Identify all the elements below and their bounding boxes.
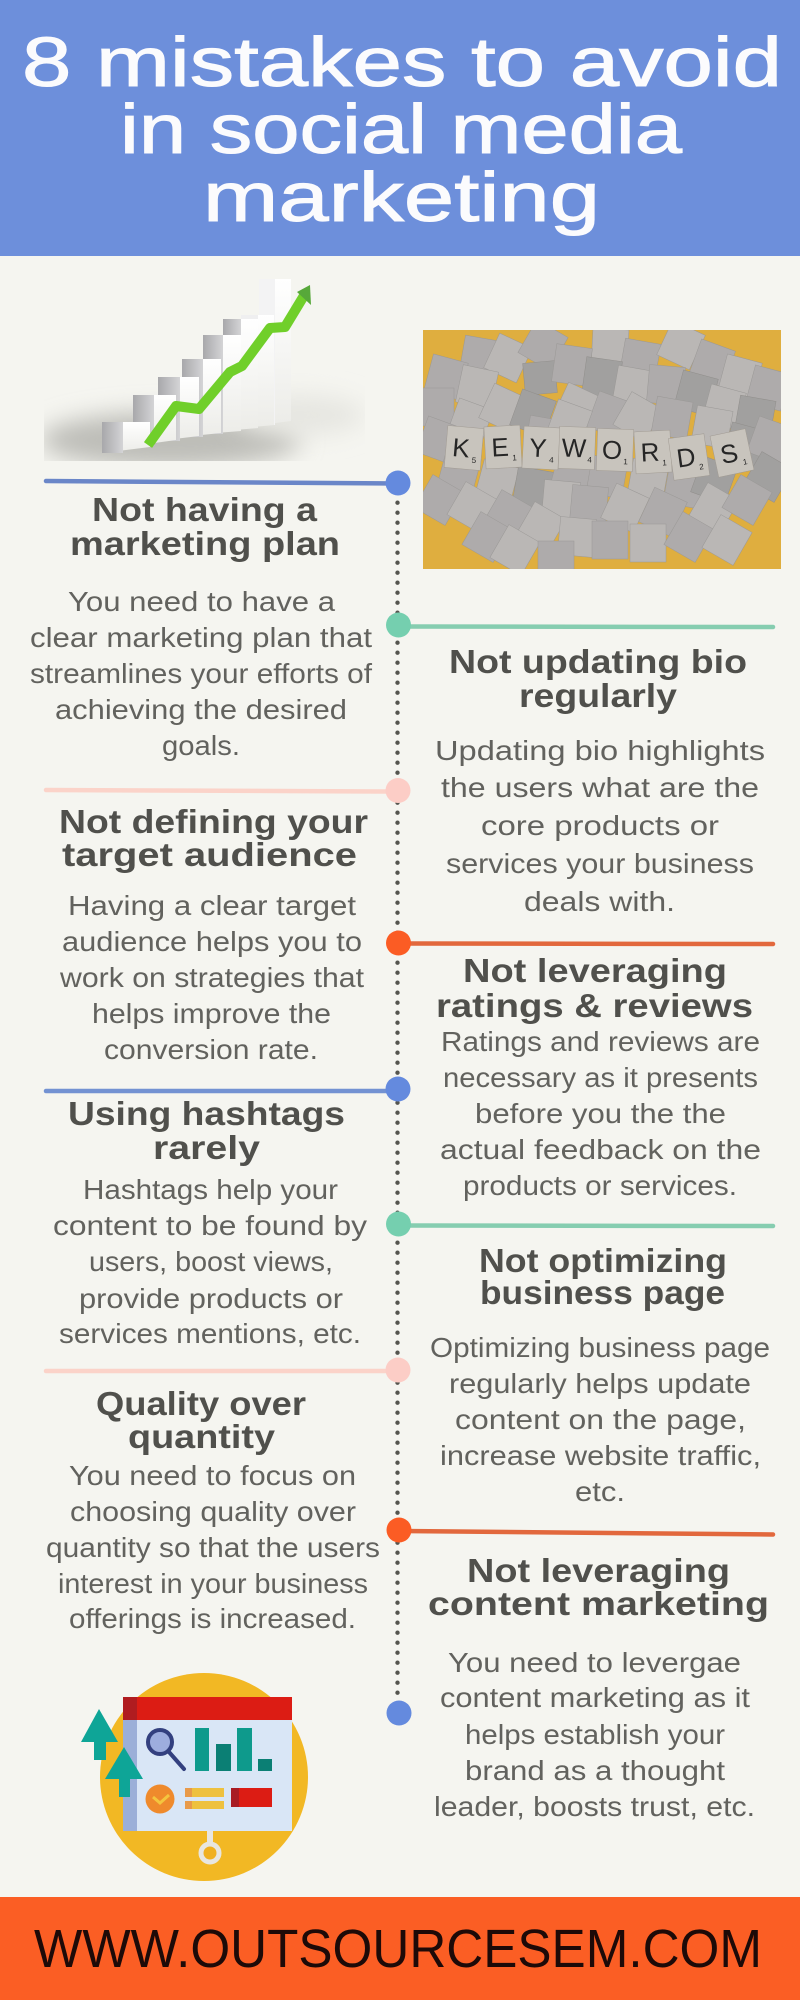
body text: quantity so that the users <box>46 1532 380 1563</box>
keyword letter tiles: 2 <box>699 462 705 472</box>
body text: leader, boosts trust, etc. <box>434 1791 755 1822</box>
connector: orange 1 <box>386 930 773 956</box>
icon: presentation board with analytics <box>81 1673 308 1881</box>
body text: streamlines your efforts of <box>30 658 372 689</box>
keyword letter tiles: 4 <box>587 455 593 465</box>
keyword letter tiles: 5 <box>471 456 477 465</box>
keyword letter tiles: E <box>491 432 509 463</box>
connector: green 1 <box>386 612 773 638</box>
body text: products or services. <box>463 1170 737 1201</box>
connector: blue 2 <box>46 1076 410 1102</box>
connector: orange 2 <box>386 1518 773 1542</box>
panel: using hashtags rarely <box>53 1095 367 1349</box>
body text: necessary as it presents <box>443 1062 758 1093</box>
heading: ratings & reviews <box>436 987 753 1024</box>
heading: Not leveraging <box>463 952 727 989</box>
keyword letter tiles: O <box>601 435 623 465</box>
heading: content marketing <box>428 1585 769 1622</box>
body text: You need to levergae <box>448 1647 741 1678</box>
keyword letter tiles: 1 <box>512 453 518 463</box>
heading: Quality over <box>96 1385 306 1422</box>
body text: You need to have a <box>68 586 335 617</box>
body text <box>59 890 364 1065</box>
keyword letter tiles: 1 <box>623 457 629 466</box>
body text: users, boost views, <box>89 1246 333 1277</box>
body text: before you the the <box>475 1098 726 1129</box>
heading: quantity <box>128 1418 276 1455</box>
heading <box>70 491 340 562</box>
body text: Updating bio highlights <box>435 735 765 766</box>
image: rising bar chart with green arrow <box>40 279 365 468</box>
timeline end dot <box>386 1700 412 1726</box>
title: 8 mistakes to avoid <box>22 23 782 101</box>
body text: work on strategies that <box>59 962 364 993</box>
heading: business page <box>480 1274 725 1311</box>
connector: green 2 <box>386 1212 773 1236</box>
keyword letter tiles: 1 <box>742 457 749 467</box>
panel: not updating bio regularly <box>435 643 765 917</box>
body text: deals with. <box>524 886 675 917</box>
keyword letter tiles: D <box>675 441 697 474</box>
heading: rarely <box>153 1129 261 1166</box>
body text: actual feedback on the <box>440 1134 761 1165</box>
body text <box>440 1026 761 1201</box>
title: in social media <box>120 90 682 168</box>
photo: scrabble tiles spelling keywords <box>423 330 781 569</box>
body text <box>430 1332 770 1507</box>
body text: helps establish your <box>465 1719 725 1750</box>
heading: Not leveraging <box>467 1552 730 1589</box>
heading: marketing plan <box>70 525 340 562</box>
heading: Not updating bio <box>449 643 747 680</box>
body text: provide products or <box>79 1283 343 1314</box>
body text: content marketing as it <box>440 1682 750 1713</box>
panel: not leveraging content marketing <box>428 1552 769 1822</box>
body text: content on the page, <box>455 1404 746 1435</box>
body text: increase website traffic, <box>440 1440 761 1471</box>
panel: not defining your target audience <box>59 803 368 1065</box>
body text: Having a clear target <box>68 890 356 921</box>
body text: the users what are the <box>441 772 759 803</box>
body text: brand as a thought <box>465 1755 725 1786</box>
body text <box>53 1174 367 1349</box>
keyword letter tiles: S <box>717 437 741 470</box>
keyword letter tiles: W <box>561 432 587 463</box>
title: marketing <box>203 158 600 236</box>
body text <box>30 586 372 761</box>
header banner <box>0 0 800 256</box>
heading <box>59 803 368 873</box>
body text: You need to focus on <box>69 1460 356 1491</box>
body text: audience helps you to <box>62 926 362 957</box>
heading: regularly <box>519 677 678 714</box>
body text: choosing quality over <box>70 1496 356 1527</box>
heading: Not defining your <box>59 803 368 840</box>
body text: clear marketing plan that <box>30 622 372 653</box>
connector: pink 2 <box>46 1358 410 1382</box>
keyword letter tiles: 4 <box>549 455 554 465</box>
panel: not having a marketing plan <box>30 491 372 761</box>
body text: content to be found by <box>53 1210 367 1241</box>
heading <box>96 1385 306 1455</box>
body text: Ratings and reviews are <box>441 1026 760 1057</box>
body text <box>434 1647 755 1822</box>
heading: Not having a <box>92 491 318 528</box>
heading <box>449 643 747 714</box>
heading <box>479 1242 727 1311</box>
body text: helps improve the <box>92 998 331 1029</box>
website url: WWW.OUTSOURCESEM.COM <box>34 1919 762 1979</box>
body text: etc. <box>575 1476 625 1507</box>
body text: core products or <box>481 810 719 841</box>
footer banner <box>0 1897 800 2000</box>
heading <box>436 952 753 1024</box>
heading: Using hashtags <box>68 1095 345 1132</box>
keyword letter tiles <box>444 425 754 480</box>
connector: blue 1 <box>46 470 410 496</box>
body text: goals. <box>162 730 240 761</box>
keyword letter tiles: K <box>451 432 472 463</box>
keyword letter tiles: R <box>640 437 660 468</box>
connector: pink 1 <box>46 778 410 803</box>
body text <box>46 1460 380 1634</box>
panel: not optimizing business page <box>430 1242 770 1507</box>
icon: up arrows <box>81 1709 143 1797</box>
dotted timeline <box>395 503 400 1693</box>
body text: regularly helps update <box>449 1368 751 1399</box>
heading <box>68 1095 345 1166</box>
body text: services your business <box>446 848 754 879</box>
heading: Not optimizing <box>479 1242 727 1279</box>
title <box>22 23 782 236</box>
panel: quality over quantity <box>46 1385 380 1634</box>
body text: Optimizing business page <box>430 1332 770 1363</box>
keyword letter tiles: 1 <box>662 458 668 468</box>
body text: achieving the desired <box>55 694 347 725</box>
body text: conversion rate. <box>104 1034 318 1065</box>
body text: services mentions, etc. <box>59 1318 361 1349</box>
heading: target audience <box>62 836 357 873</box>
body text <box>435 735 765 917</box>
body text: interest in your business <box>58 1568 368 1599</box>
body text: offerings is increased. <box>69 1603 356 1634</box>
body text: Hashtags help your <box>83 1174 338 1205</box>
panel: not leveraging ratings and reviews <box>436 952 761 1201</box>
heading <box>428 1552 769 1622</box>
keyword letter tiles: Y <box>529 432 547 463</box>
